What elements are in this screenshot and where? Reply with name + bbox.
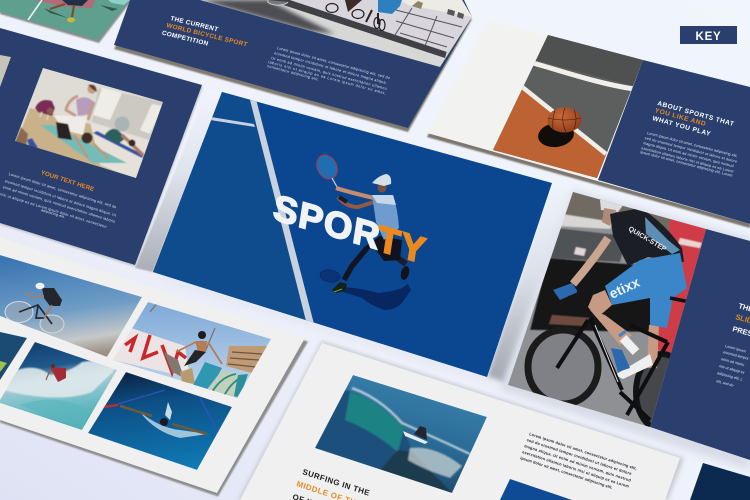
photo: cyclist on beach road <box>0 255 142 357</box>
handlebars <box>568 290 598 296</box>
text block: lorem paragraph: laboris nisi ut aliquip ex ea Lorem ipsum dolor sit amet, <box>268 60 386 95</box>
rear leg <box>652 325 654 368</box>
title: SPORTY <box>273 196 428 262</box>
text block: lorem paragraph <box>0 172 117 229</box>
photo: road cyclist: QUICK-STEP <box>627 226 668 253</box>
photo: basketball court <box>493 35 643 178</box>
photo: surfer on green wave <box>315 375 487 493</box>
text block: cropped paragraph: Lorem ipsum <box>725 344 746 353</box>
photo: road cyclist <box>508 192 706 427</box>
arm <box>573 238 608 284</box>
text block: lorem paragraph <box>267 46 390 95</box>
slide: yoga your text here <box>0 28 203 267</box>
photo: yoga class <box>15 68 163 178</box>
near arm <box>336 188 374 198</box>
blue cycling shorts <box>605 253 687 328</box>
racket shadow <box>320 269 340 283</box>
text block: cropped paragraph: nisi ut aliquip ex <box>719 364 745 375</box>
cycling shoe <box>615 354 653 379</box>
label: KEY <box>680 26 737 44</box>
title: the current world bicycle sport competition: COMPETITION <box>161 30 209 48</box>
back leg <box>395 256 406 264</box>
thigh and shin <box>588 290 612 318</box>
heading: your text here: YOUR TEXT HERE <box>40 169 95 193</box>
title: surfing in the middle of the: SURFING IN THE <box>301 467 371 498</box>
cap <box>372 174 391 186</box>
title: SPORTY: TY <box>375 218 429 272</box>
shorts <box>363 236 402 261</box>
text block: lorem paragraph: ipsum dolor sit amet, consectetur adipiscing elit, Lorem <box>640 150 733 178</box>
photo: small left crop <box>0 332 27 380</box>
shadow: right of main slide <box>487 183 572 383</box>
court: white side line <box>249 96 314 324</box>
text block: lorem paragraph: consectetur adipiscing elit. <box>267 64 319 82</box>
text block: cropped paragraph: enim ad minim <box>721 357 745 367</box>
slide: about sports with basketball <box>427 20 750 228</box>
text block: lorem paragraph: Lorem ipsum dolor sit amet, consectetur adipiscing elit, sed do <box>277 46 390 80</box>
slide: photo collage <box>0 237 308 496</box>
face <box>378 184 386 192</box>
text block: lorem paragraph: adipiscing elit. <box>41 208 66 219</box>
title: the current world bicycle sport competition: THE CURRENT <box>169 15 219 33</box>
slide: surfing in the middle of the <box>238 341 684 500</box>
shoes <box>332 282 347 293</box>
text block: lorem paragraph: nisi ut aliquip ex ea Lorem ipsum dolor sit amet, consectetur <box>0 192 108 229</box>
text block: lorem paragraph <box>520 431 638 490</box>
helmet <box>600 200 622 212</box>
text block: lorem paragraph: Lorem ipsum dolor sit amet, consectetur adipiscing elit, <box>647 131 738 158</box>
text block: lorem paragraph: Lorem ipsum dolor sit amet, consectetur adipiscing elit, sed do <box>8 172 117 209</box>
text block: lorem paragraph <box>640 131 738 178</box>
shadow: below main slide <box>153 272 520 392</box>
text block: lorem paragraph: exercitation ullamco laboris nisi ut aliquip ex ea Lorem <box>641 146 734 174</box>
front leg <box>344 248 367 280</box>
photo: swimmer <box>88 372 232 470</box>
text block: lorem paragraph: sed do eiusmod tempor incididunt ut labore et dolore <box>644 136 737 164</box>
racket <box>316 154 338 180</box>
slide: dark pool crop <box>690 463 750 500</box>
tennis player <box>313 152 411 310</box>
bike wheels <box>528 330 598 404</box>
glove <box>553 283 578 300</box>
slide: world bicycle sport competition <box>114 0 475 132</box>
slide: green tennis court photo <box>0 0 132 43</box>
slide: cyclist photo and text <box>500 185 750 470</box>
photo: road cyclist: etixx <box>607 274 642 302</box>
sock <box>623 338 636 352</box>
jersey <box>610 208 684 266</box>
court: white service line <box>210 117 255 127</box>
text block: lorem paragraph: Ut enim ad minim veniam, quis nostrud exercitation ullamco <box>271 56 387 91</box>
text block: lorem paragraph: magna aliqua. Ut enim ad minim veniam, quis nostrud <box>524 443 632 483</box>
bike frame <box>557 318 668 420</box>
photo: bike track <box>195 0 475 70</box>
text block: lorem paragraph: magna aliqua. Ut enim ad minim veniam, quis nostrud <box>643 141 734 168</box>
photo: surfer spray <box>0 342 117 430</box>
text block: cropped paragraph: adipiscing elit, L <box>717 371 743 382</box>
title text: cropped heading <box>731 301 750 342</box>
text block: cropped paragraph <box>716 344 750 388</box>
text block: lorem paragraph: eiusmod tempor incididunt ut labore et dolore magna aliqua. <box>274 51 387 85</box>
text block: lorem paragraph: enim ad minim veniam, quis nostrud exercitation ullamco laboris <box>2 185 116 224</box>
text block: lorem paragraph: ipsum dolor sit amet, consectetur adipiscing elit. <box>520 455 613 490</box>
title: about sports that you like and what you play: YOU LIKE AND <box>654 107 707 128</box>
photo: blue court crop <box>500 479 572 500</box>
title: about sports that you like and what you play: ABOUT SPORTS THAT <box>656 100 735 128</box>
text block: lorem paragraph: exercitation ullamco laboris nisi ut aliquip ex ea Lorem <box>522 449 630 489</box>
text block: cropped paragraph: elit, sed do <box>716 379 734 388</box>
title: about sports that you like and what you play: WHAT YOU PLAY <box>651 115 712 138</box>
text block: cropped paragraph: eiusmod tempor <box>723 350 750 361</box>
shirt <box>372 195 399 240</box>
slide: SPORTY cover with tennis player <box>150 90 552 377</box>
title: about sports that you like and what you play <box>651 100 735 138</box>
player shadow <box>343 284 411 310</box>
photo: graffiti windsurfer <box>113 302 271 398</box>
title: SPORTY: SPOR <box>271 187 384 258</box>
photo: small left thumbnail <box>0 55 11 87</box>
text block: lorem paragraph: Lorem ipsum dolor sit amet, consectetur adipiscing elit, <box>529 431 638 471</box>
court: left panel <box>150 90 310 322</box>
shadow: left of main slide <box>135 90 222 272</box>
label: KEY: KEY <box>695 31 722 43</box>
text block: lorem paragraph: sed do eiusmod tempor incididunt ut labore et dolore <box>526 437 633 476</box>
text block: lorem paragraph: eiusmod tempor incididunt ut labore et dolore magna aliqua. Ut <box>4 179 117 217</box>
title: the current world bicycle sport competition: WORLD BICYCLE SPORT <box>165 22 248 49</box>
far arm <box>338 197 374 207</box>
